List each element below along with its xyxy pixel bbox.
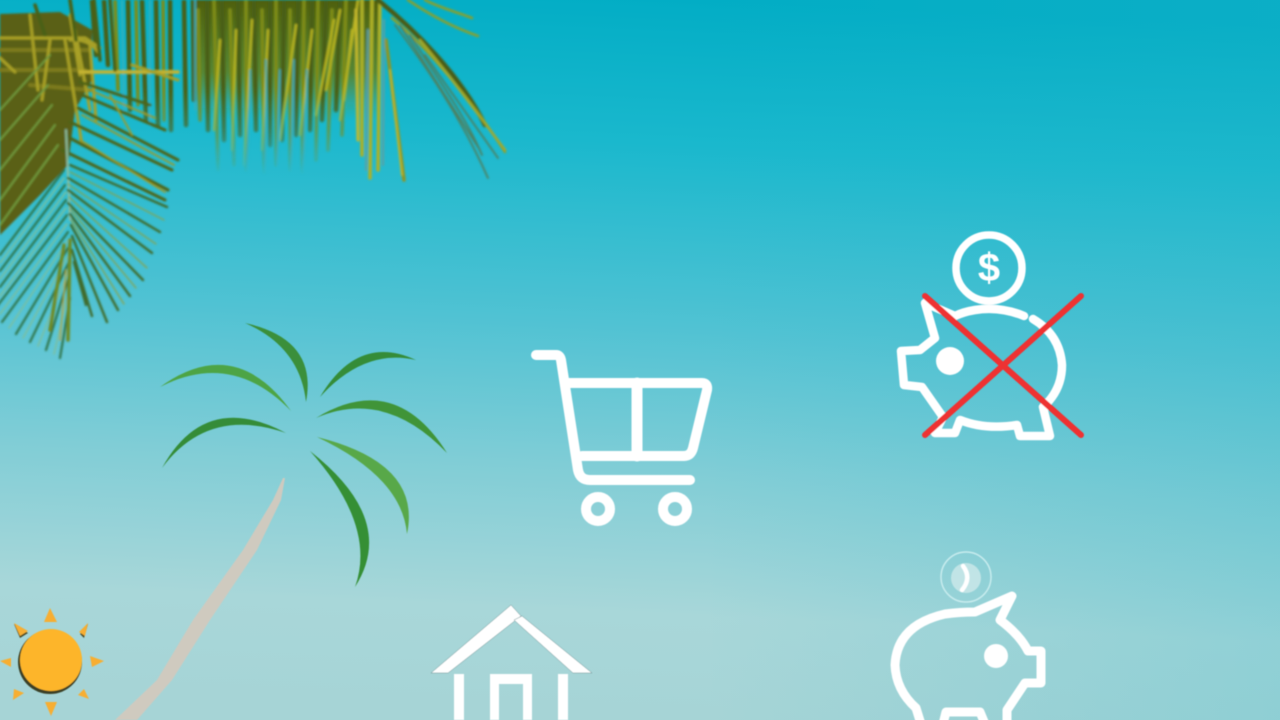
frond: right sweep xyxy=(378,0,505,178)
piggy bank outline xyxy=(901,303,1062,436)
icon: house xyxy=(431,605,592,720)
walls and door xyxy=(454,674,568,720)
palm trunk xyxy=(115,478,285,720)
palm frond photo: top-left corner xyxy=(0,0,505,358)
icon: piggy bank crossed out xyxy=(901,235,1081,436)
icon: sun xyxy=(0,608,104,716)
coin with dollar sign xyxy=(956,235,1022,301)
sun disc xyxy=(18,629,82,694)
coin with dollar sign: $ xyxy=(978,246,1000,290)
frond: left leaf top cluster xyxy=(0,0,178,235)
roof xyxy=(431,605,592,673)
frond: left leaf lower leaflets xyxy=(0,130,167,358)
frond: hanging top curtain xyxy=(92,0,404,180)
icon: shopping cart xyxy=(536,355,707,521)
palm leaves xyxy=(160,323,447,587)
translucent coin xyxy=(941,552,991,602)
piggy bank outline xyxy=(895,596,1041,720)
red cross xyxy=(925,296,1081,435)
sun rays xyxy=(0,608,104,716)
palm tree illustration xyxy=(115,323,447,720)
icon: piggy bank with coin xyxy=(895,552,1041,720)
